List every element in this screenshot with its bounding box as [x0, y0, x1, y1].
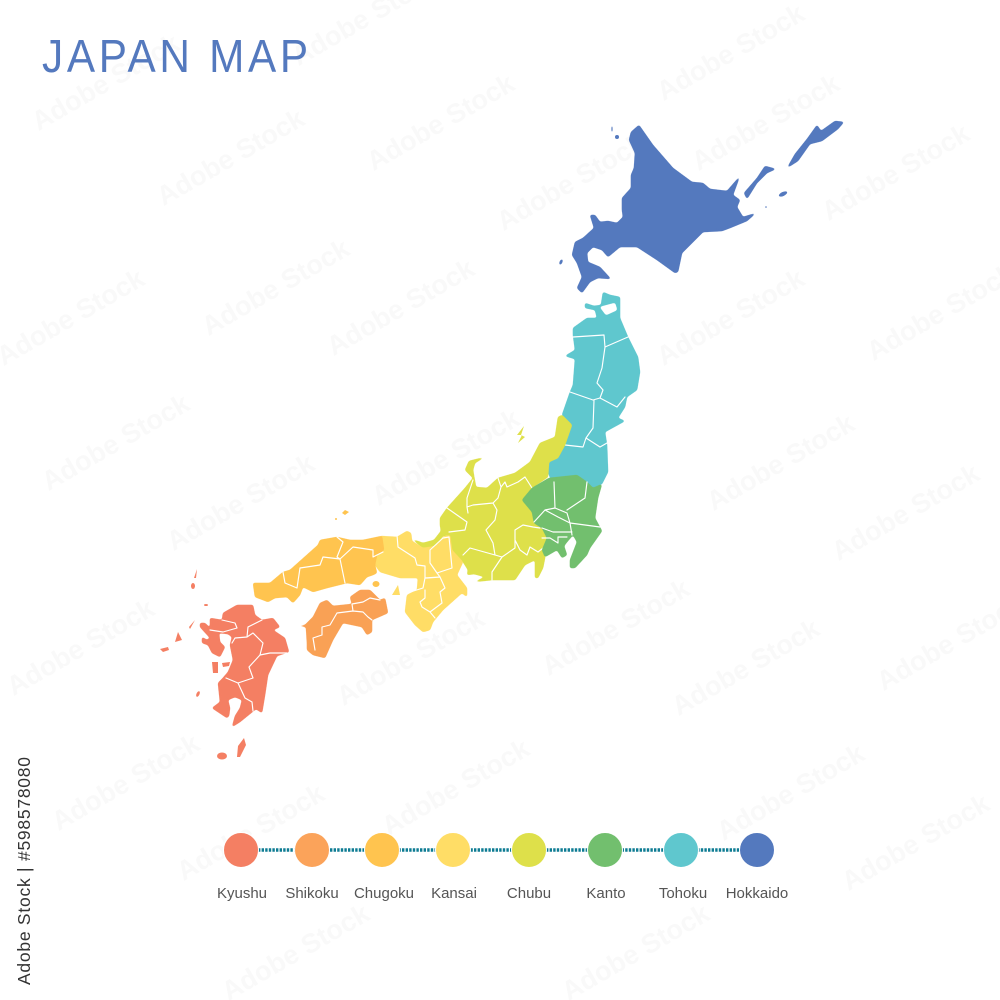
region: Shikoku [297, 590, 388, 658]
legend [217, 832, 788, 902]
watermark pattern: Adobe Stock [362, 67, 520, 176]
legend: Chubu: Chubu [507, 885, 551, 902]
region: Kyushu [160, 569, 289, 760]
title: JAPAN MAP [42, 31, 312, 82]
watermark pattern: Adobe Stock [322, 252, 480, 361]
legend: Kyushu: Kyushu [217, 885, 267, 902]
islands of Kyushu [160, 569, 246, 760]
watermark pattern: Adobe Stock [702, 407, 860, 516]
legend: Kanto: Kanto [586, 885, 626, 902]
legend: Shikoku [285, 832, 339, 902]
watermark pattern: Adobe Stock [827, 457, 985, 566]
watermark pattern: Adobe Stock [817, 117, 975, 226]
legend: Chugoku: Chugoku [354, 885, 414, 902]
legend: Hokkaido: Hokkaido [726, 885, 788, 902]
legend: Kansai [431, 832, 477, 902]
watermark pattern: Adobe Stock [537, 572, 695, 681]
legend: Tohoku: Tohoku [659, 885, 707, 902]
legend: Shikoku: Shikoku [285, 885, 339, 902]
legend connector [258, 848, 741, 852]
legend: Kanto [586, 832, 626, 902]
watermark pattern: Adobe Stock [367, 402, 525, 511]
watermark pattern: Adobe Stock [332, 602, 490, 711]
region: Chugoku [253, 510, 384, 603]
watermark pattern: Adobe Stock [37, 387, 195, 496]
map of Japan [160, 121, 844, 760]
legend: Kansai: Kansai [431, 885, 477, 902]
watermark pattern: Adobe Stock [27, 27, 185, 136]
region: Tohoku [548, 292, 640, 488]
watermark pattern: Adobe Stock [2, 592, 160, 701]
region: Chubu [412, 415, 572, 582]
watermark pattern: Adobe Stock [197, 232, 355, 341]
watermark pattern: Adobe Stock [652, 262, 810, 371]
legend: Chubu [507, 832, 551, 902]
legend: Chugoku [354, 832, 414, 902]
region: Hokkaido [559, 121, 844, 293]
watermark pattern: Adobe Stock [172, 777, 330, 886]
watermark pattern: Adobe Stock [687, 67, 845, 176]
watermark pattern: Adobe Stock [652, 0, 810, 106]
legend: Tohoku [659, 832, 707, 902]
watermark pattern: Adobe Stock [152, 102, 310, 211]
watermark pattern: Adobe Stock [377, 732, 535, 841]
watermark pattern: Adobe Stock [492, 127, 650, 236]
watermark pattern: Adobe Stock [837, 787, 995, 896]
watermark pattern: Adobe Stock [162, 447, 320, 556]
region: Kansai [372, 531, 467, 632]
side credit: Adobe Stock | #598578080 [14, 757, 34, 985]
watermark pattern: Adobe Stock [47, 727, 205, 836]
legend: Hokkaido [726, 832, 788, 902]
watermark pattern: Adobe Stock [667, 612, 825, 721]
legend: Kyushu [217, 832, 267, 902]
watermark pattern: Adobe Stock [712, 737, 870, 846]
region: Kanto [522, 475, 602, 568]
